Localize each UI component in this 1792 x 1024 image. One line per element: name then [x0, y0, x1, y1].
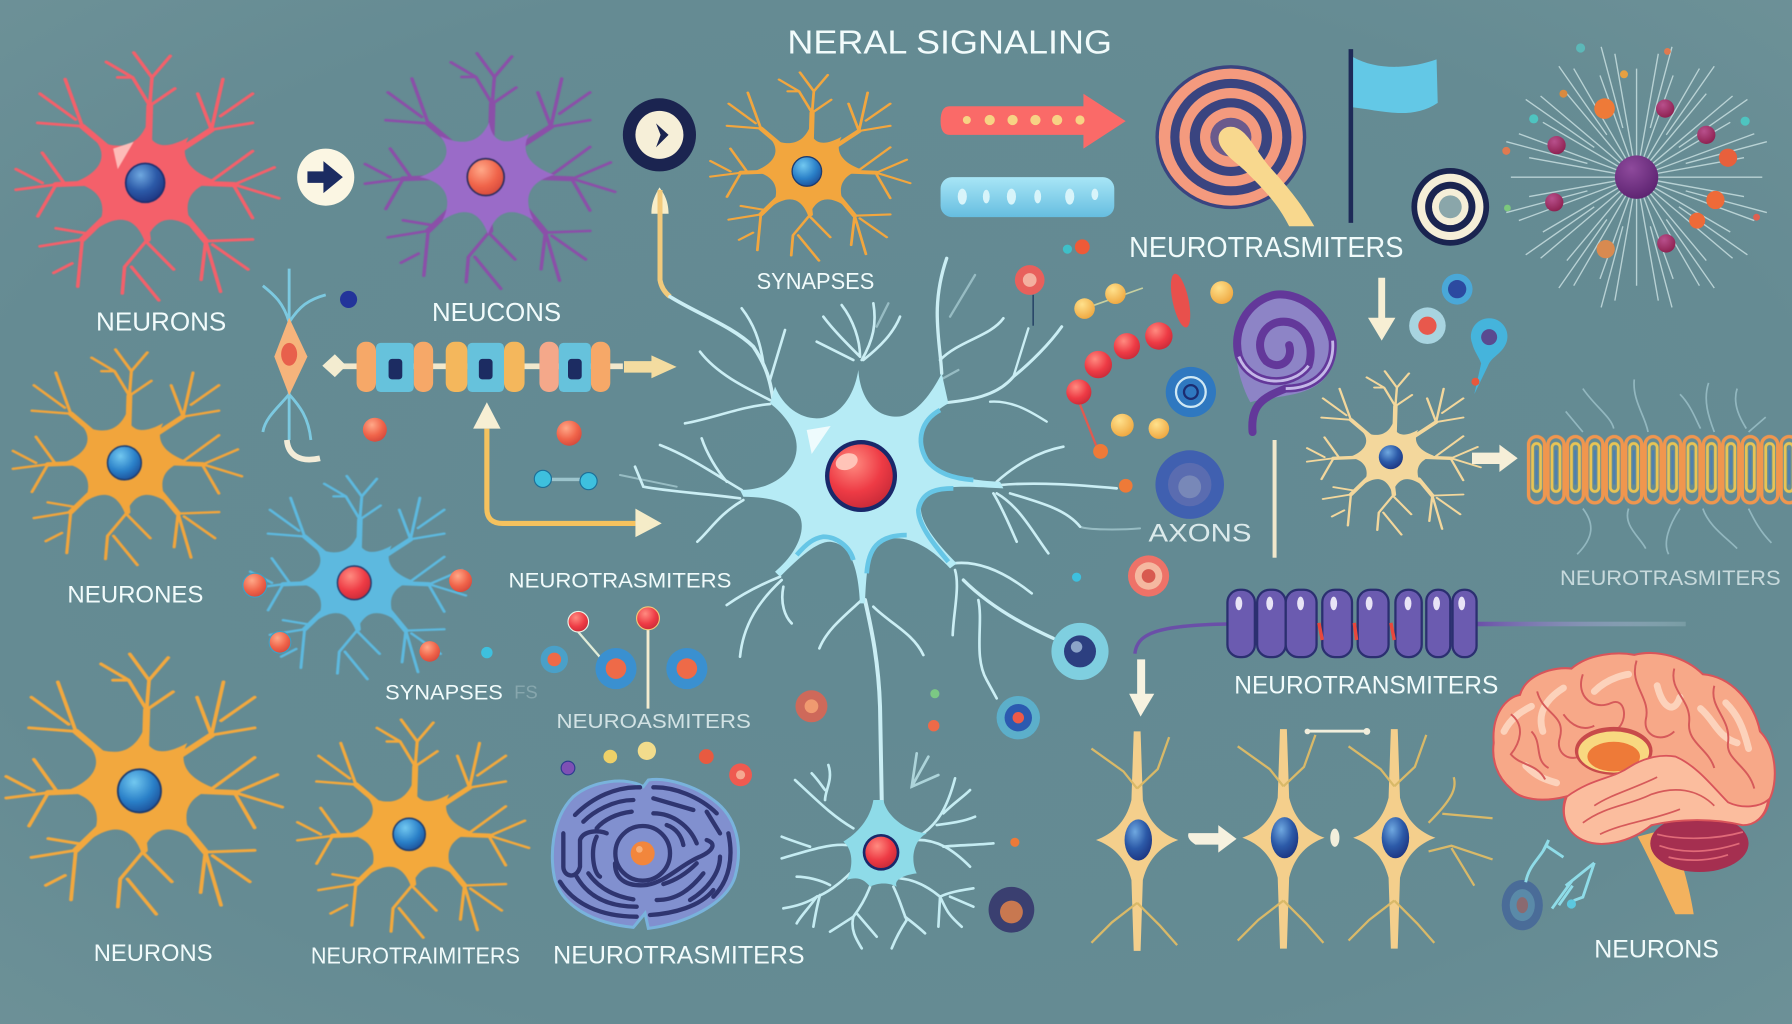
tan neuron — [1307, 371, 1481, 535]
maze brain — [552, 779, 738, 928]
label: neurons top-left: NEURONS — [96, 306, 226, 336]
blue spiral vesicle — [1166, 367, 1216, 417]
purple channel — [1135, 590, 1686, 657]
upper vesicle chain — [1015, 239, 1233, 459]
central neuron — [620, 190, 1140, 834]
pink arrow with dots — [941, 94, 1126, 149]
label: synapses lower: SYNAPSES — [385, 679, 503, 704]
bipolar neuron three — [1349, 729, 1493, 949]
faint label fragment: FS — [514, 681, 538, 702]
small target — [1411, 168, 1489, 246]
arrowhead up to badge — [651, 187, 669, 214]
vesicle cluster — [541, 607, 707, 709]
label: neurotrasmiters right: NEUROTRASMITERS — [1560, 565, 1781, 590]
terminal vesicles — [795, 479, 1169, 933]
brain — [1493, 653, 1775, 914]
signal badge — [623, 98, 696, 171]
label: neurotransmiters lower right: NEUROTRANSMITERS — [1234, 672, 1498, 700]
label: neurotrasmiters bottom: NEUROTRASMITERS — [553, 941, 805, 969]
down arrow right — [1368, 278, 1395, 341]
bipolar neuron one — [1091, 731, 1178, 951]
blue pill — [941, 177, 1114, 217]
teal squiggles — [1526, 840, 1594, 909]
synapse mark — [1330, 829, 1339, 847]
purple spiral — [1236, 294, 1333, 432]
label: neurons bottom-right: NEURONS — [1594, 936, 1719, 964]
bipolar neuron two — [1238, 729, 1325, 949]
label: neurotrasmiters center: NEUROTRASMITERS — [509, 567, 731, 592]
label: neucons: NEUCONS — [432, 297, 561, 327]
dots above maze — [561, 742, 752, 786]
navy ball — [340, 291, 357, 308]
label: neurotraimiters: NEUROTRAIMITERS — [311, 942, 520, 968]
yellow arrow line into dendrite — [660, 190, 670, 297]
connecting arrow — [1188, 825, 1237, 853]
balls around blue neuron — [243, 569, 493, 662]
yellow elbow arrow — [473, 402, 662, 537]
label: synapses top: SYNAPSES — [757, 268, 874, 294]
blue neuron — [250, 476, 466, 679]
small spiral icon near brain — [1502, 880, 1543, 930]
title: NERAL SIGNALING — [787, 25, 1112, 62]
bipolar blue neuron — [263, 269, 326, 460]
flag — [1349, 49, 1438, 223]
label: neurones: NEURONES — [67, 581, 203, 608]
arrow to coil — [1472, 445, 1518, 472]
orange synapse neuron — [710, 72, 910, 261]
label: neurotrasmiters top: NEUROTRASMITERS — [1129, 232, 1403, 264]
orange neuron bottom-center — [298, 720, 529, 938]
spiral target — [1155, 65, 1314, 226]
lower small neuron — [782, 753, 993, 948]
label: neuroasmiters: NEUROASMITERS — [557, 710, 751, 733]
orange neuron bottom-left — [6, 654, 282, 914]
down arrow to neurons — [1129, 659, 1154, 717]
orange neuron left — [13, 350, 242, 565]
purple neuron — [365, 53, 615, 289]
label: neurons bottom-left: NEURONS — [94, 940, 213, 967]
label: axons: AXONS — [1149, 520, 1251, 548]
red neuron — [16, 53, 279, 300]
indigo vesicle — [1155, 450, 1224, 519]
ion channel row — [322, 342, 677, 392]
free red balls — [363, 418, 582, 446]
teal pair — [534, 470, 597, 490]
arrow badge — [297, 149, 354, 206]
right vesicles — [1409, 274, 1507, 394]
double arrow line — [1305, 728, 1370, 735]
cream vertical line — [1273, 440, 1277, 558]
coil with faded dendrites — [1527, 379, 1792, 554]
radial starburst neuron — [1502, 43, 1767, 307]
